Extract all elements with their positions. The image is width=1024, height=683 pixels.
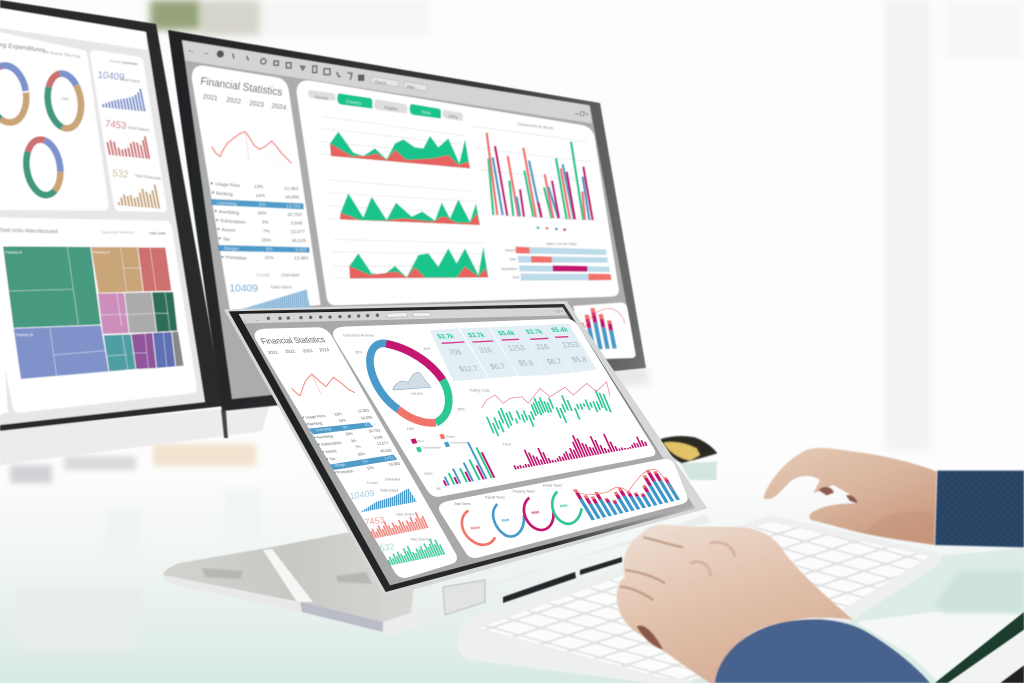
financial table: Licensing [217, 200, 237, 206]
total taxes gauge: $820K [470, 526, 481, 530]
red bars [105, 132, 149, 159]
laptop table: 25% [356, 451, 367, 457]
left monitor screen [0, 8, 205, 425]
laptop table: Banking [307, 420, 323, 426]
curve over stacked bars [583, 308, 625, 330]
hinge [443, 580, 485, 615]
funnel tabs: Funnel [257, 272, 270, 277]
base dark patches [202, 568, 372, 584]
panel: laptop sidebar [255, 327, 457, 578]
KPI tiles [430, 323, 597, 381]
front hand [617, 525, 853, 683]
laptop table: 11% [365, 465, 375, 470]
desk reflection right [845, 548, 1024, 683]
left monitor [0, 0, 270, 465]
bar label: 100% [424, 472, 433, 476]
laptop table: Assets [324, 448, 337, 454]
payroll taxes gauge [485, 496, 524, 536]
back sleeve [935, 471, 1024, 547]
toolbar icons [217, 51, 364, 80]
laptop chart marker [312, 374, 322, 395]
financial table: 34,005 [285, 195, 300, 200]
left strip panel [0, 300, 8, 415]
area chart 3 [333, 239, 488, 278]
KPI values: 1253 [560, 340, 581, 349]
laptop base and hinge [163, 515, 712, 636]
KPI values: $6.7 [545, 357, 564, 366]
laptop table: 12,363 [356, 408, 370, 413]
laptop toolbar: → [254, 317, 259, 323]
laptop overview tab: Overview [385, 478, 401, 482]
total orders label: Total Orders [127, 125, 149, 132]
property taxes gauge: Property Taxes [513, 490, 535, 494]
base front edge [163, 575, 300, 612]
KPI values: $5.4k [550, 327, 570, 334]
back hand finger gaps [818, 487, 857, 503]
laptop table: 3,545 [372, 434, 384, 440]
financial table: Usage Fees [215, 181, 241, 188]
title: Financial Statistics [200, 75, 284, 99]
donut labels: 15% [423, 347, 431, 351]
data dropdown [404, 82, 427, 91]
total users label: Total Users [120, 76, 140, 84]
laptop base top surface [163, 530, 420, 632]
panel: lower right stacked chart [573, 303, 635, 359]
laptop channels label: Total Channels [410, 538, 432, 542]
silver frame [224, 301, 707, 597]
laptop table: 34,005 [360, 415, 373, 420]
laptop toolbar [239, 307, 567, 324]
year selector: 2024 [271, 103, 287, 112]
silver band [383, 515, 712, 636]
financial table: 13,720 [286, 203, 301, 208]
financial table: 14% [256, 193, 265, 198]
filter tabs: Region [384, 105, 399, 112]
laptop orders label: Total Orders [396, 512, 414, 516]
donut labels: 35% [355, 350, 363, 354]
laptop magenta bar chart [506, 424, 647, 469]
KPI values: $3.7k [525, 329, 544, 336]
row bullets [212, 183, 222, 257]
laptop table: Usage Fees [304, 413, 326, 420]
black bezel [229, 304, 695, 592]
forward arrow: → [201, 46, 211, 57]
financial table: 25% [262, 237, 271, 242]
financial table: 3,545 [291, 221, 303, 226]
financial table: 7% [263, 228, 270, 233]
treemap factory labels: Factory A [5, 249, 22, 254]
excise taxes gauge: $50K [560, 503, 569, 508]
panel: laptop taxes [439, 459, 688, 558]
laptop table: 5% [361, 458, 370, 464]
laptop table: Margin [333, 462, 347, 468]
financial table: Subscription [220, 218, 246, 225]
blurred objects under the monitor [10, 465, 52, 483]
donut labels [343, 334, 465, 431]
financial table: 11% [265, 255, 274, 260]
laptop table: 33% [344, 431, 354, 436]
bar chart title: Transactions by Month [517, 122, 554, 130]
mouse on desk [660, 436, 717, 480]
property taxes gauge: $60K [531, 510, 540, 515]
front hand finger creases [620, 537, 683, 600]
monitor stand post [221, 410, 228, 438]
panel: total units treemap: Factory C [93, 249, 110, 254]
financial table: 45,525 [292, 238, 306, 243]
donut centre labels: Paid [62, 97, 68, 101]
donut legend: Wages [446, 434, 456, 438]
bar chart legend [537, 224, 539, 231]
donut legend: Transportation [422, 446, 441, 450]
laptop total users: 10409 [349, 488, 375, 501]
grey screen [239, 307, 693, 585]
total channels label: Total Channels [135, 173, 161, 181]
laptop years: 2022 [284, 349, 296, 354]
tablet corner at bottom right [935, 612, 1024, 683]
front sleeve [715, 619, 930, 683]
laptop small grouped bars [428, 441, 494, 486]
bar label low: 0% [436, 487, 441, 491]
highlighted rows [211, 199, 304, 209]
funnel tabs: Funnel Overview [110, 59, 138, 66]
total orders number: 7453 [104, 119, 127, 132]
treemap tabs: Total Units Variance [102, 231, 134, 235]
total taxes gauge: Total Taxes [454, 502, 471, 506]
filter tabs [308, 90, 463, 121]
financial table: 3% [262, 220, 268, 225]
filter tabs: Rental [315, 94, 328, 101]
centre monitor [168, 30, 650, 411]
year selector: 2021 [202, 93, 218, 102]
donut labels: +23.5% [410, 392, 423, 396]
KPI values: 1253 [506, 344, 527, 353]
laptop table: 13,383 [387, 461, 401, 467]
donut legend: Licensing fees [450, 440, 470, 444]
area chart 1 [320, 117, 470, 168]
year selector: 2023 [249, 100, 265, 109]
excise taxes gauge [543, 484, 582, 524]
hands [617, 448, 1024, 683]
centre monitor bezel [168, 30, 646, 411]
back arrow: ← [186, 44, 196, 55]
total users number: 10409 [97, 70, 125, 83]
reflection on base [263, 549, 313, 602]
laptop table: Avertising [315, 433, 334, 440]
stacked chart trend line [573, 469, 673, 495]
gap between fingers [637, 625, 663, 650]
laptop table: 14% [337, 418, 348, 423]
blue users bars [233, 289, 310, 313]
laptop chart labels: Trailing Costs [469, 388, 490, 392]
KPI values [436, 327, 589, 373]
filter tabs: Time [421, 109, 432, 116]
keyboard [458, 515, 942, 683]
donut inner sparkline [393, 372, 431, 390]
overview tab: Overview [281, 272, 300, 277]
KPI values: $5.8 [570, 355, 589, 364]
KPI values: $12.7 [457, 364, 480, 373]
financial table: 13,383 [294, 256, 309, 261]
laptop table: 13% [333, 411, 343, 417]
donut legend [411, 434, 470, 452]
total users number: 10409 [229, 284, 258, 295]
back hand [763, 448, 937, 545]
laptop pink trend line [482, 382, 610, 408]
laptop blue bars [360, 488, 417, 512]
laptop table: 12,577 [376, 440, 389, 446]
financial table: 13% [254, 184, 263, 189]
window controls [575, 112, 588, 116]
financial table: 3,421 [295, 247, 307, 252]
treemap tiles [3, 246, 184, 379]
gantt row labels: Search [505, 249, 516, 253]
laptop toolbar: – ▢ × [554, 310, 563, 314]
laptop screen [224, 301, 707, 597]
financial table: Promotion [225, 255, 247, 261]
tab labels: Title Source Title Pool [42, 49, 81, 59]
panel: KPI funnel [90, 50, 167, 212]
financial table: Avertising [219, 209, 240, 215]
lower chart label: Trend [503, 443, 511, 447]
KPI values: 316 [534, 342, 550, 351]
laptop table: Tax [328, 456, 336, 461]
desk surface [0, 440, 1024, 683]
panel: main charts [297, 81, 619, 305]
stacked bar chart [574, 467, 678, 520]
treemap heading: Total Units Manufactured [0, 228, 58, 235]
laptop table: 3% [350, 438, 358, 443]
knuckle highlights [690, 542, 735, 577]
gantt row labels: Offer [509, 258, 518, 262]
donut labels: 15% [407, 427, 415, 431]
laptop table: 45,525 [379, 448, 393, 453]
keyboard body [458, 515, 942, 683]
KPI values: $5.4k [497, 330, 516, 337]
laptop donut chart [370, 343, 449, 423]
laptop years: 2023 [301, 348, 314, 353]
top white strip [0, 8, 147, 50]
KPI values: $6.7 [488, 362, 507, 371]
grouped bar chart [472, 122, 599, 230]
year selector: 2022 [226, 97, 242, 106]
donut labels: 35% [457, 408, 465, 412]
line chart [206, 124, 292, 170]
laptop candlestick green bars [481, 389, 615, 437]
financial table: Tax [223, 236, 231, 242]
laptop total channels: 532 [379, 541, 395, 553]
laptop line chart [292, 374, 355, 396]
vent slots [503, 572, 576, 603]
filter tabs: KPIs [449, 114, 458, 120]
keyboard keys [480, 522, 930, 680]
laptop table: Promotion [335, 468, 354, 475]
laptop green bars [383, 538, 444, 565]
laptop table: 3,421 [383, 455, 395, 460]
laptop table: 10,720 [363, 421, 377, 427]
donut legend: Rent [417, 439, 424, 443]
blue bars [99, 85, 145, 111]
financial table: Margin [224, 246, 239, 251]
KPI values: 316 [477, 346, 494, 355]
payroll taxes gauge: Payroll Taxes [485, 496, 505, 500]
treemap tab selected: Total Units [149, 231, 166, 235]
laptop table: 7% [354, 444, 362, 449]
gantt row labels: Deal [512, 276, 519, 280]
financial table: 12,577 [291, 229, 305, 234]
financial table: Assets [221, 227, 236, 233]
donut 3 [22, 137, 64, 198]
financial table: 12,363 [284, 186, 299, 191]
left monitor bezel [0, 0, 224, 431]
filter tabs: Country [346, 99, 362, 106]
laptop table: 30,753 [367, 428, 381, 433]
KPI values: $5.8 [517, 359, 535, 368]
panel: financial statistics sidebar [192, 66, 321, 313]
laptop table [303, 408, 401, 475]
centre monitor screen [182, 40, 636, 399]
data dropdown: Data [407, 84, 416, 90]
laptop toolbar: ← [243, 318, 248, 324]
laptop total users label: Total Users [380, 488, 398, 492]
financial table: 5% [266, 246, 273, 251]
KPI values: $3.7k [467, 332, 486, 339]
financial table: 33% [257, 211, 267, 216]
panel: donut charts [0, 32, 109, 211]
laptop years: 2024 [318, 347, 330, 352]
panel: laptop main [333, 319, 655, 497]
laptop table: Licensing [314, 426, 332, 432]
stacked bars behind laptop [578, 307, 615, 350]
donut 2 [44, 71, 85, 131]
shadow below centre monitor [560, 366, 650, 392]
gantt row labels: Negotiation [501, 267, 518, 271]
gantt chart [501, 242, 611, 281]
total channels number: 532 [112, 168, 129, 181]
toolbar [182, 41, 592, 123]
base purple edge [300, 602, 383, 632]
laptop table: Subscription [320, 440, 342, 447]
financial table: Banking [216, 191, 233, 197]
laptop years: 2021 [267, 350, 279, 355]
area chart 2 [330, 180, 480, 225]
search dropdown [371, 77, 398, 87]
property taxes gauge [513, 490, 554, 530]
back hand shading [863, 511, 934, 543]
laptop total orders: 7453 [364, 515, 385, 527]
tan bars [115, 181, 159, 209]
KPI values: $3.7k [436, 333, 456, 341]
laptop red bars [366, 511, 428, 539]
laptop table: 9% [341, 424, 350, 430]
year selector [202, 93, 287, 112]
payroll taxes gauge: $52K [501, 518, 510, 523]
donut 1 [0, 63, 30, 125]
financial table [211, 181, 310, 261]
gantt title: Sales Funnel Days [546, 242, 577, 246]
KPI values: 706 [447, 348, 463, 357]
laptop title: Financial Statistics [259, 335, 327, 346]
panel: total units treemap [0, 217, 197, 413]
financial table: 5% [259, 202, 266, 207]
financial table: 20,753 [287, 212, 302, 217]
laptop years [267, 347, 330, 355]
panel: total units treemap: Factory B [16, 332, 33, 337]
laptop funnel tabs: Funnel [367, 481, 378, 485]
excise taxes gauge: Excise Taxes [543, 484, 562, 488]
gantt row labels [501, 249, 519, 280]
donut labels: Transaction Revenue [343, 334, 374, 338]
total taxes gauge [454, 502, 495, 545]
monitor stand bar [0, 404, 270, 465]
search dropdown: Search [375, 80, 387, 85]
total users label: Total Users [270, 284, 292, 289]
